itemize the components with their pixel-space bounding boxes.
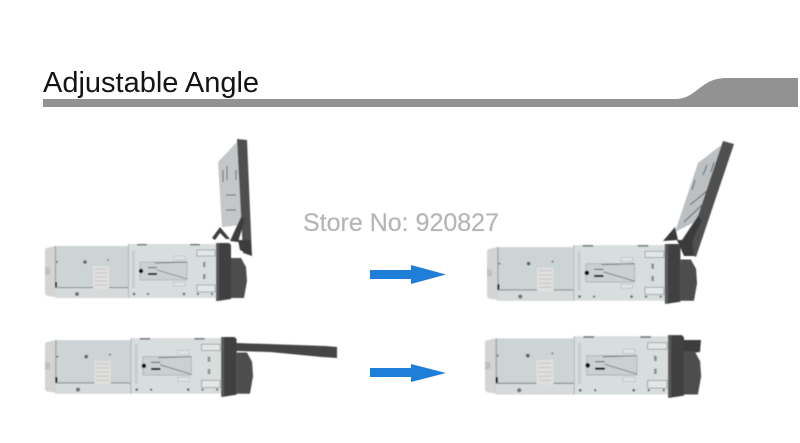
chassis [45,243,247,301]
chassis [485,335,701,398]
device: bottom left, screen flat [45,337,337,397]
device: bottom right, screen closed [485,335,701,398]
screen frame [686,141,734,257]
screen arm [236,343,337,358]
chassis [487,244,697,304]
screen back panel [218,141,243,227]
folded screen [684,340,701,354]
hinge arms [663,216,702,256]
screen back panel [675,143,724,232]
device: top right, screen tilted [487,141,734,304]
panel markings [223,166,236,210]
watermark: store number: Store No: 920827 [303,209,499,237]
screen frame [237,139,252,256]
chassis [45,337,253,397]
arrow: bottom [370,364,446,382]
panel markings [684,162,714,222]
header bar [43,78,798,107]
device: top left, screen upright [45,139,252,301]
title: Adjustable Angle [43,67,259,99]
arrow: top [370,265,446,284]
hinge arms [212,217,252,256]
